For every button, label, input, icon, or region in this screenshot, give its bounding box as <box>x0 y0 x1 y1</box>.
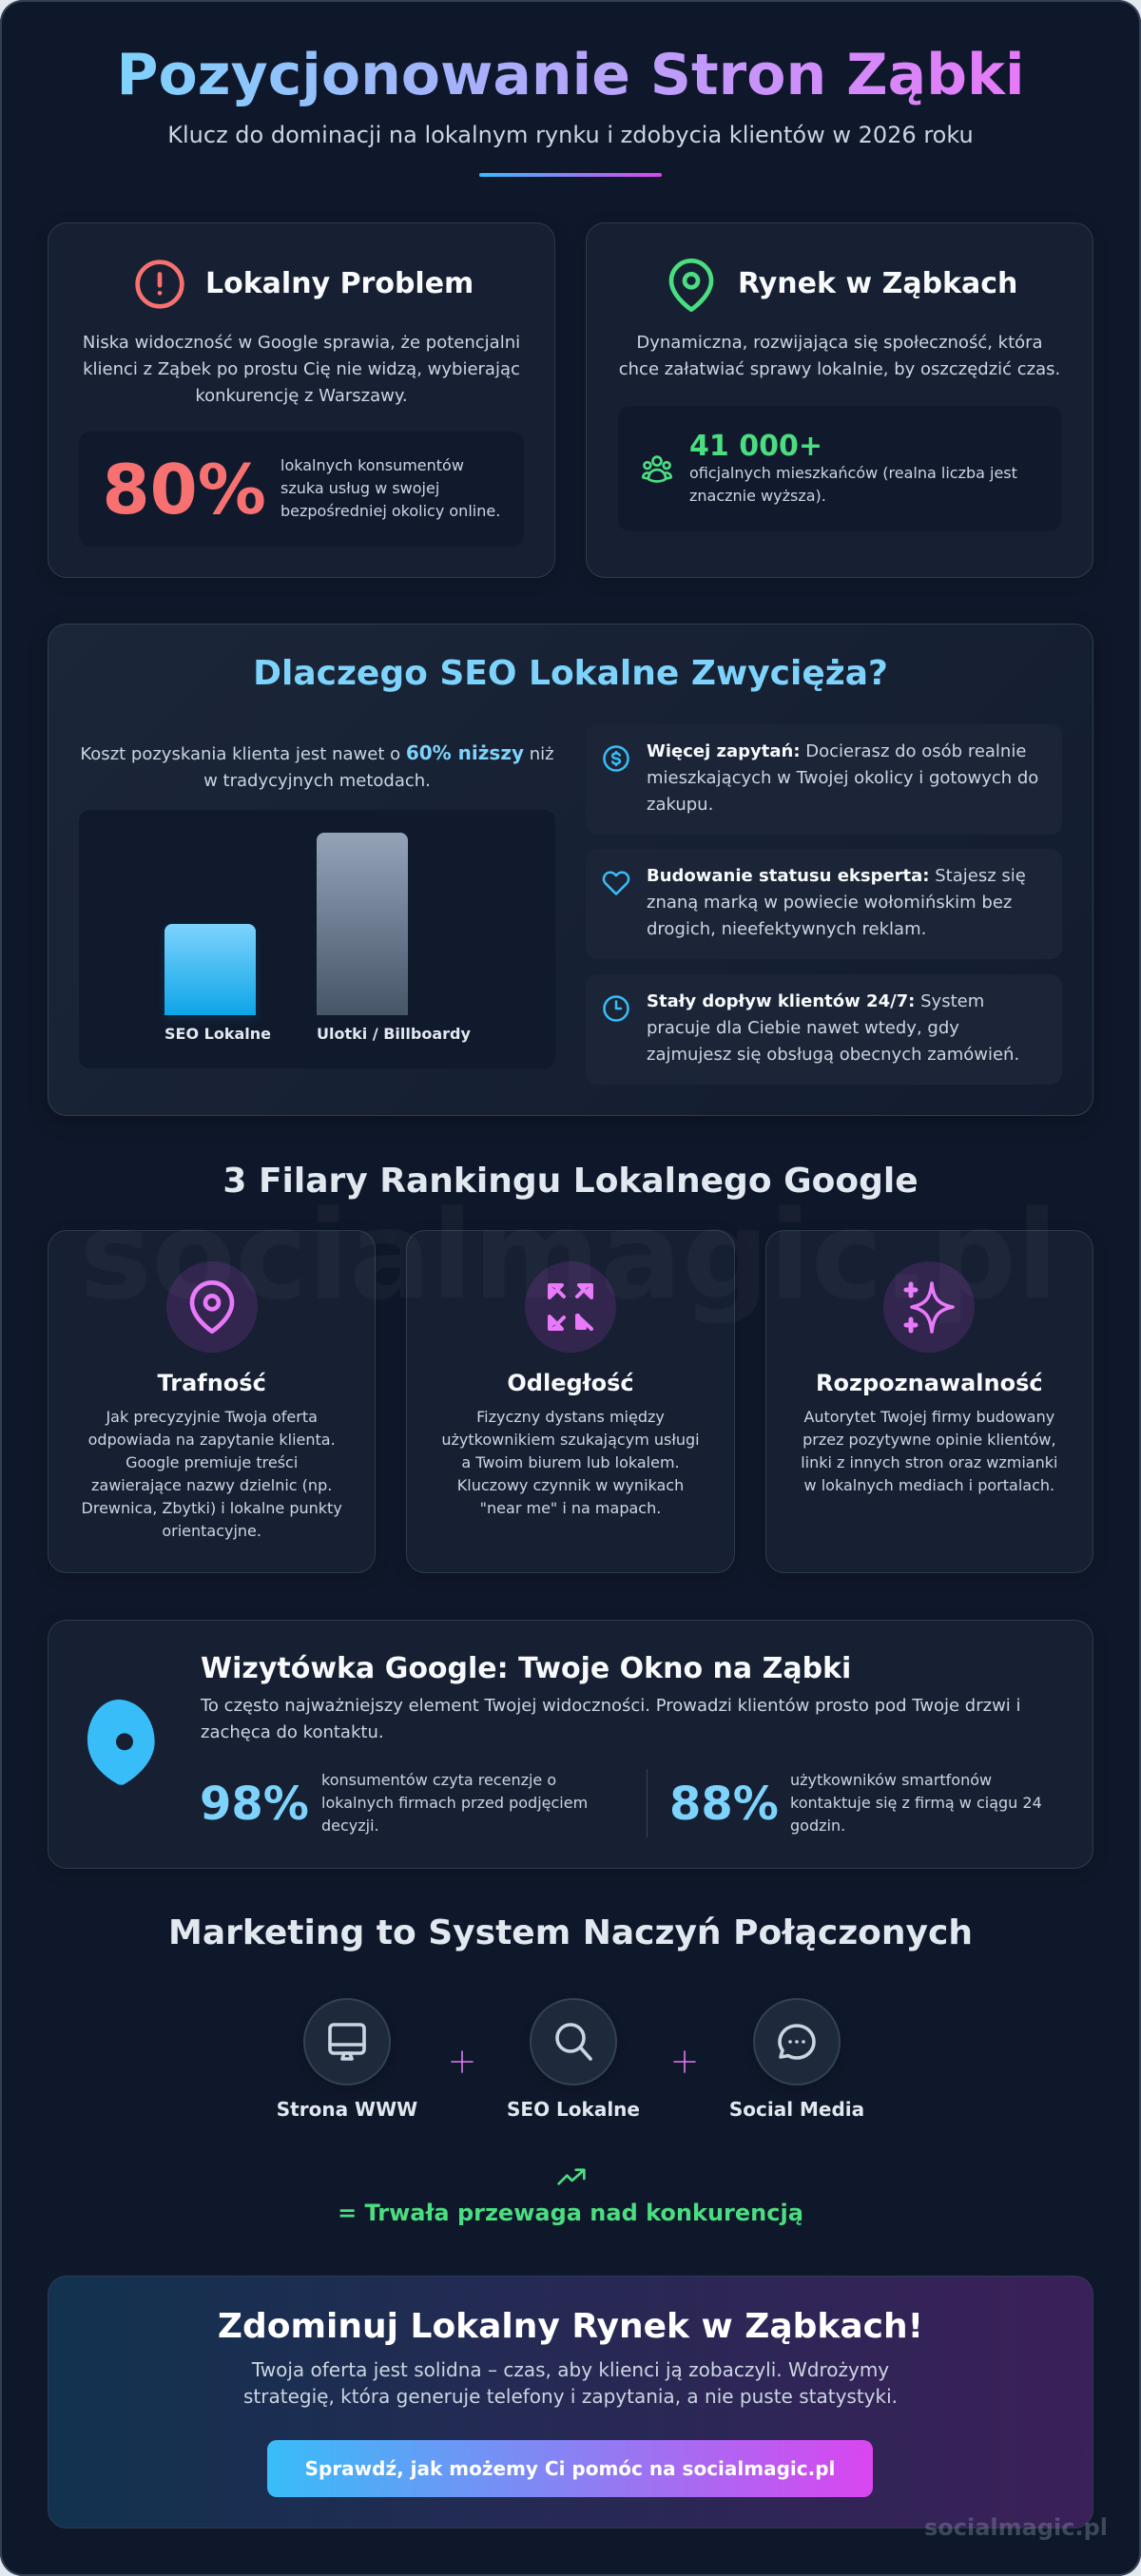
result line: = Trwała przewaga nad konkurencją <box>338 2200 803 2226</box>
text block: Koszt pozyskania klienta jest nawet o 60% niższy niż <box>80 741 554 764</box>
cta text: strategię, która generuje telefony i zapytania, a nie puste statystyki. <box>243 2385 898 2408</box>
stat description <box>280 456 500 520</box>
stat text <box>321 1771 588 1835</box>
heading: Lokalny Problem <box>205 267 474 300</box>
section heading: filary: 3 Filary Rankingu Lokalnego Google <box>222 1162 919 1200</box>
icon: search <box>555 2023 592 2061</box>
icon: monitor <box>328 2023 366 2061</box>
bar label: SEO Lokalne <box>164 1025 271 1043</box>
panel: dlaczego seo lokalne <box>48 624 1093 1116</box>
stat text: lokalnych firmach przed podjęciem <box>321 1794 588 1812</box>
text block: Niska widoczność w Google sprawia, że potencjalni <box>83 333 520 353</box>
pillar title: Trafność <box>158 1369 266 1395</box>
node label: Social Media <box>729 2098 864 2121</box>
benefit text: pracuje dla Ciebie nawet wtedy, gdy <box>647 1018 959 1038</box>
benefit text: znaną marką w powiecie wołomińskim bez <box>647 893 1012 913</box>
pillar text: odpowiada na zapytanie klienta. <box>88 1431 336 1449</box>
icon circle: pin <box>166 1261 258 1353</box>
heading: Rynek w Ząbkach <box>738 267 1017 300</box>
benefit text <box>647 866 1026 939</box>
stat description <box>689 464 1017 505</box>
icon: map pin <box>669 259 713 312</box>
panel: wizytówka google <box>48 1620 1093 1869</box>
node label: Strona WWW <box>277 2098 417 2121</box>
pillar text: w lokalnych mediach i portalach. <box>804 1476 1054 1494</box>
stat text: konsumentów czyta recenzje o <box>321 1771 556 1789</box>
icon: blue location pin <box>87 1700 155 1785</box>
title: Pozycjonowanie Stron Ząbki <box>116 42 1025 108</box>
heading: Dlaczego SEO Lokalne Zwycięża? <box>253 654 888 693</box>
pillar text: linki z innych stron oraz wzmianki <box>801 1453 1057 1471</box>
icon: map pin <box>190 1280 234 1334</box>
bar label: Ulotki / Billboardy <box>317 1025 471 1043</box>
icon circle: arrows <box>525 1261 616 1353</box>
stat description: oficjalnych mieszkańców (realna liczba jest <box>689 464 1017 482</box>
text block <box>619 333 1060 379</box>
icon: expand arrows <box>548 1283 593 1331</box>
header divider <box>479 173 662 177</box>
benefit text <box>647 991 1019 1065</box>
icon: users <box>642 455 672 483</box>
text block: To często najważniejszy element Twojej widoczności. Prowadzi klientów prosto pod Twoje drzwi i <box>201 1696 1021 1716</box>
pillar text: Kluczowy czynnik w wynikach <box>457 1476 684 1494</box>
text block: chce załatwiać sprawy lokalnie, by oszczędzić czas. <box>619 359 1060 379</box>
panel: call to action <box>48 2276 1093 2528</box>
cta heading: Zdominuj Lokalny Rynek w Ząbkach! <box>218 2307 923 2346</box>
benefit: status eksperta <box>586 849 1062 959</box>
pillar text: przez pozytywne opinie klientów, <box>803 1431 1056 1449</box>
stat text: decyzji. <box>321 1817 379 1835</box>
benefit: stały dopływ <box>586 974 1062 1085</box>
bar: ulotki <box>317 833 408 1015</box>
node: seo lokalne <box>507 1998 640 2121</box>
text block <box>83 333 520 406</box>
icon: sparkles <box>903 1281 955 1334</box>
icon circle <box>753 1998 841 2086</box>
stat number: 41 000+ <box>689 430 822 463</box>
pillar text: a Twoim biurem lub lokalem. <box>461 1453 680 1471</box>
benefit text: zakupu. <box>647 795 713 815</box>
pillar text: Drewnica, Zbytki) i lokalne punkty <box>82 1499 342 1517</box>
text block <box>200 1696 1021 1742</box>
pillar title: Odległość <box>507 1369 634 1395</box>
stat text: kontaktuje się z firmą w ciągu 24 <box>790 1794 1042 1812</box>
cta button: Sprawdź, jak możemy Ci pomóc na socialmagic.pl <box>305 2457 835 2480</box>
pillar text: Autorytet Twojej firmy budowany <box>803 1408 1054 1426</box>
stat number: 80% <box>103 450 266 529</box>
icon circle <box>530 1998 617 2086</box>
benefit text: drogich, nieefektywnych reklam. <box>647 919 926 939</box>
pillar text: zawierające nazwy dzielnic (np. <box>91 1476 332 1494</box>
panel: lokalny problem <box>48 222 555 578</box>
section heading: system naczyń połączonych: Marketing to System Naczyń Połączonych <box>168 1913 973 1952</box>
stat description: lokalnych konsumentów <box>280 456 464 474</box>
benefit text: Budowanie statusu eksperta: Stajesz się <box>647 866 1026 886</box>
stat description: szuka usług w swojej <box>280 479 439 497</box>
icon: trend arrow <box>557 2168 586 2185</box>
benefit text: mieszkających w Twojej okolicy i gotowych do <box>647 768 1038 788</box>
stat: 98%: 98% <box>200 1778 309 1831</box>
benefit: więcej zapytań <box>586 724 1062 835</box>
plus <box>673 2050 696 2073</box>
pillar text <box>801 1408 1057 1494</box>
pillar text: Jak precyzyjnie Twoja oferta <box>106 1408 318 1426</box>
icon circle <box>303 1998 391 2086</box>
pillar text: Fizyczny dystans między <box>476 1408 665 1426</box>
heading: Wizytówka Google: Twoje Okno na Ząbki <box>201 1652 851 1685</box>
node: strona www <box>277 1998 417 2121</box>
small watermark: socialmagic.pl <box>924 2514 1108 2541</box>
node label: SEO Lokalne <box>507 2098 640 2121</box>
benefit text: Więcej zapytań: Docierasz do osób realnie <box>647 741 1026 761</box>
stat text <box>790 1771 1042 1835</box>
icon: heart <box>603 871 629 895</box>
panel: rozpoznawalność <box>765 1230 1093 1573</box>
benefit text: Stały dopływ klientów 24/7: System <box>647 991 984 1011</box>
text block: konkurencję z Warszawy. <box>195 386 408 406</box>
node: social media <box>729 1998 864 2121</box>
stat: 88%: 88% <box>669 1778 779 1831</box>
large watermark: socialmagic.pl <box>79 1185 1058 1327</box>
text block: klienci z Ząbek po prostu Cię nie widzą, wybierając <box>83 359 520 379</box>
benefit text: zajmujesz się obsługą obecnych zamówień. <box>647 1045 1019 1065</box>
cta text: Twoja oferta jest solidna – czas, aby klienci ją zobaczyli. Wdrożymy <box>252 2358 889 2381</box>
stat description: znacznie wyższa). <box>689 487 826 505</box>
pillar text: "near me" i na mapach. <box>480 1499 661 1517</box>
pillar text <box>82 1408 342 1540</box>
stat divider <box>647 1769 648 1837</box>
subtitle: Klucz do dominacji na lokalnym rynku i zdobycia klientów w 2026 roku <box>167 122 974 148</box>
stat text: użytkowników smartfonów <box>790 1771 992 1789</box>
pillar text: orientacyjne. <box>162 1522 261 1540</box>
stat box: 41 000+ <box>618 406 1061 531</box>
pillar text: użytkownikiem szukającym usługi <box>441 1431 700 1449</box>
icon: alert circle <box>135 260 184 309</box>
icon circle: sparkle <box>883 1261 975 1353</box>
icon: dollar <box>603 745 629 772</box>
stat text: godzin. <box>790 1817 845 1835</box>
cta text <box>243 2358 898 2408</box>
panel: rynek w ząbkach <box>586 222 1093 578</box>
panel: trafność <box>48 1230 376 1573</box>
icon: clock <box>603 995 629 1022</box>
panel: odległość <box>406 1230 735 1573</box>
bar chart <box>79 810 555 1068</box>
text block: w tradycyjnych metodach. <box>203 771 431 791</box>
bar: seo lokalne <box>164 924 256 1015</box>
pillar text: Google premiuje treści <box>126 1453 298 1471</box>
text block: zachęca do kontaktu. <box>201 1722 384 1742</box>
pillar title: Rozpoznawalność <box>816 1369 1043 1395</box>
plus <box>451 2050 474 2073</box>
stat box: 80% <box>79 432 524 547</box>
benefit text <box>647 741 1038 815</box>
stat description: bezpośredniej okolicy online. <box>280 502 500 520</box>
icon: chat bubble <box>778 2024 816 2060</box>
text block <box>80 741 554 791</box>
cta button <box>267 2440 873 2497</box>
text block: Dynamiczna, rozwijająca się społeczność, która <box>636 333 1043 353</box>
pillar text <box>441 1408 700 1517</box>
